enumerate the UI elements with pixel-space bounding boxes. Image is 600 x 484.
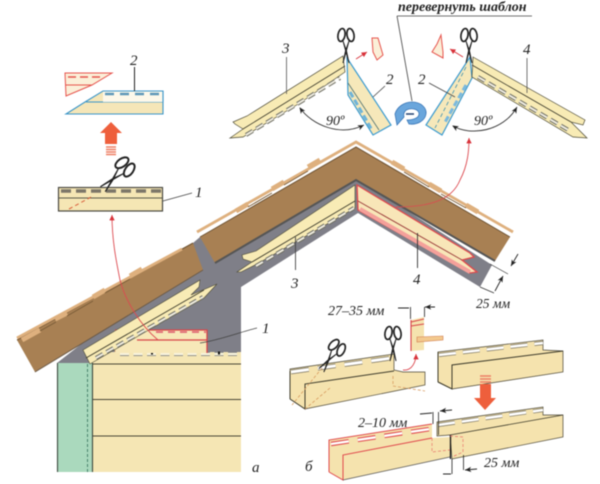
right label 2: 2 — [418, 72, 426, 88]
left 90 degree arc — [300, 108, 364, 130]
dimension 27-35 mm — [328, 304, 435, 319]
label 1 lower — [200, 321, 270, 343]
right top blue piece 2 — [426, 57, 472, 135]
dimension 27-35 mm: 27–35 мм — [328, 304, 384, 319]
label 4 roof — [413, 233, 421, 288]
red offcut — [65, 73, 112, 96]
flip template caption — [397, 0, 532, 101]
strip 4 red — [357, 185, 477, 273]
dimension 25 mm bottom — [443, 455, 519, 474]
siding panels — [92, 352, 241, 472]
dimension 2-10 mm — [358, 410, 452, 435]
red curve to cut piece — [403, 354, 416, 370]
icon: blue rotate arrow — [395, 102, 426, 125]
left scissors — [337, 28, 355, 63]
right 90 degree arc — [453, 107, 517, 131]
left red offcut — [356, 38, 383, 60]
shingle edge — [17, 142, 513, 340]
lower soffit strip — [83, 280, 217, 364]
trimmed piece with blue outline — [66, 91, 163, 114]
label a: а — [252, 460, 260, 476]
left 90 degree arc: 90º — [326, 114, 345, 129]
long red arrow to panel 1 — [112, 215, 158, 340]
label 1 upper — [163, 185, 202, 201]
house wall and roof — [17, 142, 513, 472]
label 4 roof: 4 — [413, 272, 421, 288]
grey underlay and gable — [57, 178, 492, 364]
right label 4 — [523, 42, 531, 93]
right 90 degree arc: 90º — [474, 114, 493, 129]
red arrow to top right — [396, 138, 469, 207]
label 2 upper left: 2 — [130, 53, 138, 69]
label b: б — [305, 459, 313, 475]
lower roof board — [17, 243, 203, 372]
label 3 roof — [290, 237, 298, 292]
left channel with scissors — [290, 326, 425, 409]
orange arrow down — [474, 376, 496, 410]
label 3 roof: 3 — [290, 276, 298, 292]
left label 2: 2 — [386, 72, 394, 88]
right red offcut — [432, 35, 463, 58]
label 1 upper: 1 — [195, 185, 202, 201]
right channel — [438, 340, 563, 389]
label 2 upper left — [130, 53, 138, 91]
dimension: 25 mm at roof edge — [476, 254, 518, 311]
small cut end piece — [411, 317, 443, 351]
panel 1 with scissors — [58, 153, 162, 211]
dimension: 25 mm at roof edge: 25 мм — [476, 296, 510, 311]
left top strip 3 — [230, 56, 345, 138]
right label 4: 4 — [523, 42, 531, 58]
right scissors — [460, 28, 478, 63]
red marked soffit panel 1 — [115, 330, 207, 353]
scissors icons — [314, 336, 349, 375]
lower right channel — [437, 407, 563, 459]
strip 3 — [237, 185, 355, 272]
left label 2 — [373, 72, 394, 97]
left label 3 — [281, 41, 290, 94]
green corner post — [57, 363, 92, 472]
dimension 25 mm bottom: 25 мм — [484, 456, 519, 471]
left label 3: 3 — [281, 41, 290, 57]
right label 2 — [418, 72, 455, 97]
lower red channel — [329, 424, 463, 480]
flip template caption: перевернуть шаблон — [398, 0, 527, 15]
big orange arrow up — [100, 122, 122, 154]
left top blue piece 2 — [347, 58, 391, 135]
scissors icon — [95, 153, 139, 197]
label 1 lower: 1 — [262, 321, 270, 337]
upper roof board — [200, 147, 510, 263]
right top strip 4 — [472, 57, 587, 138]
dimension 2-10 mm: 2–10 мм — [358, 416, 407, 431]
